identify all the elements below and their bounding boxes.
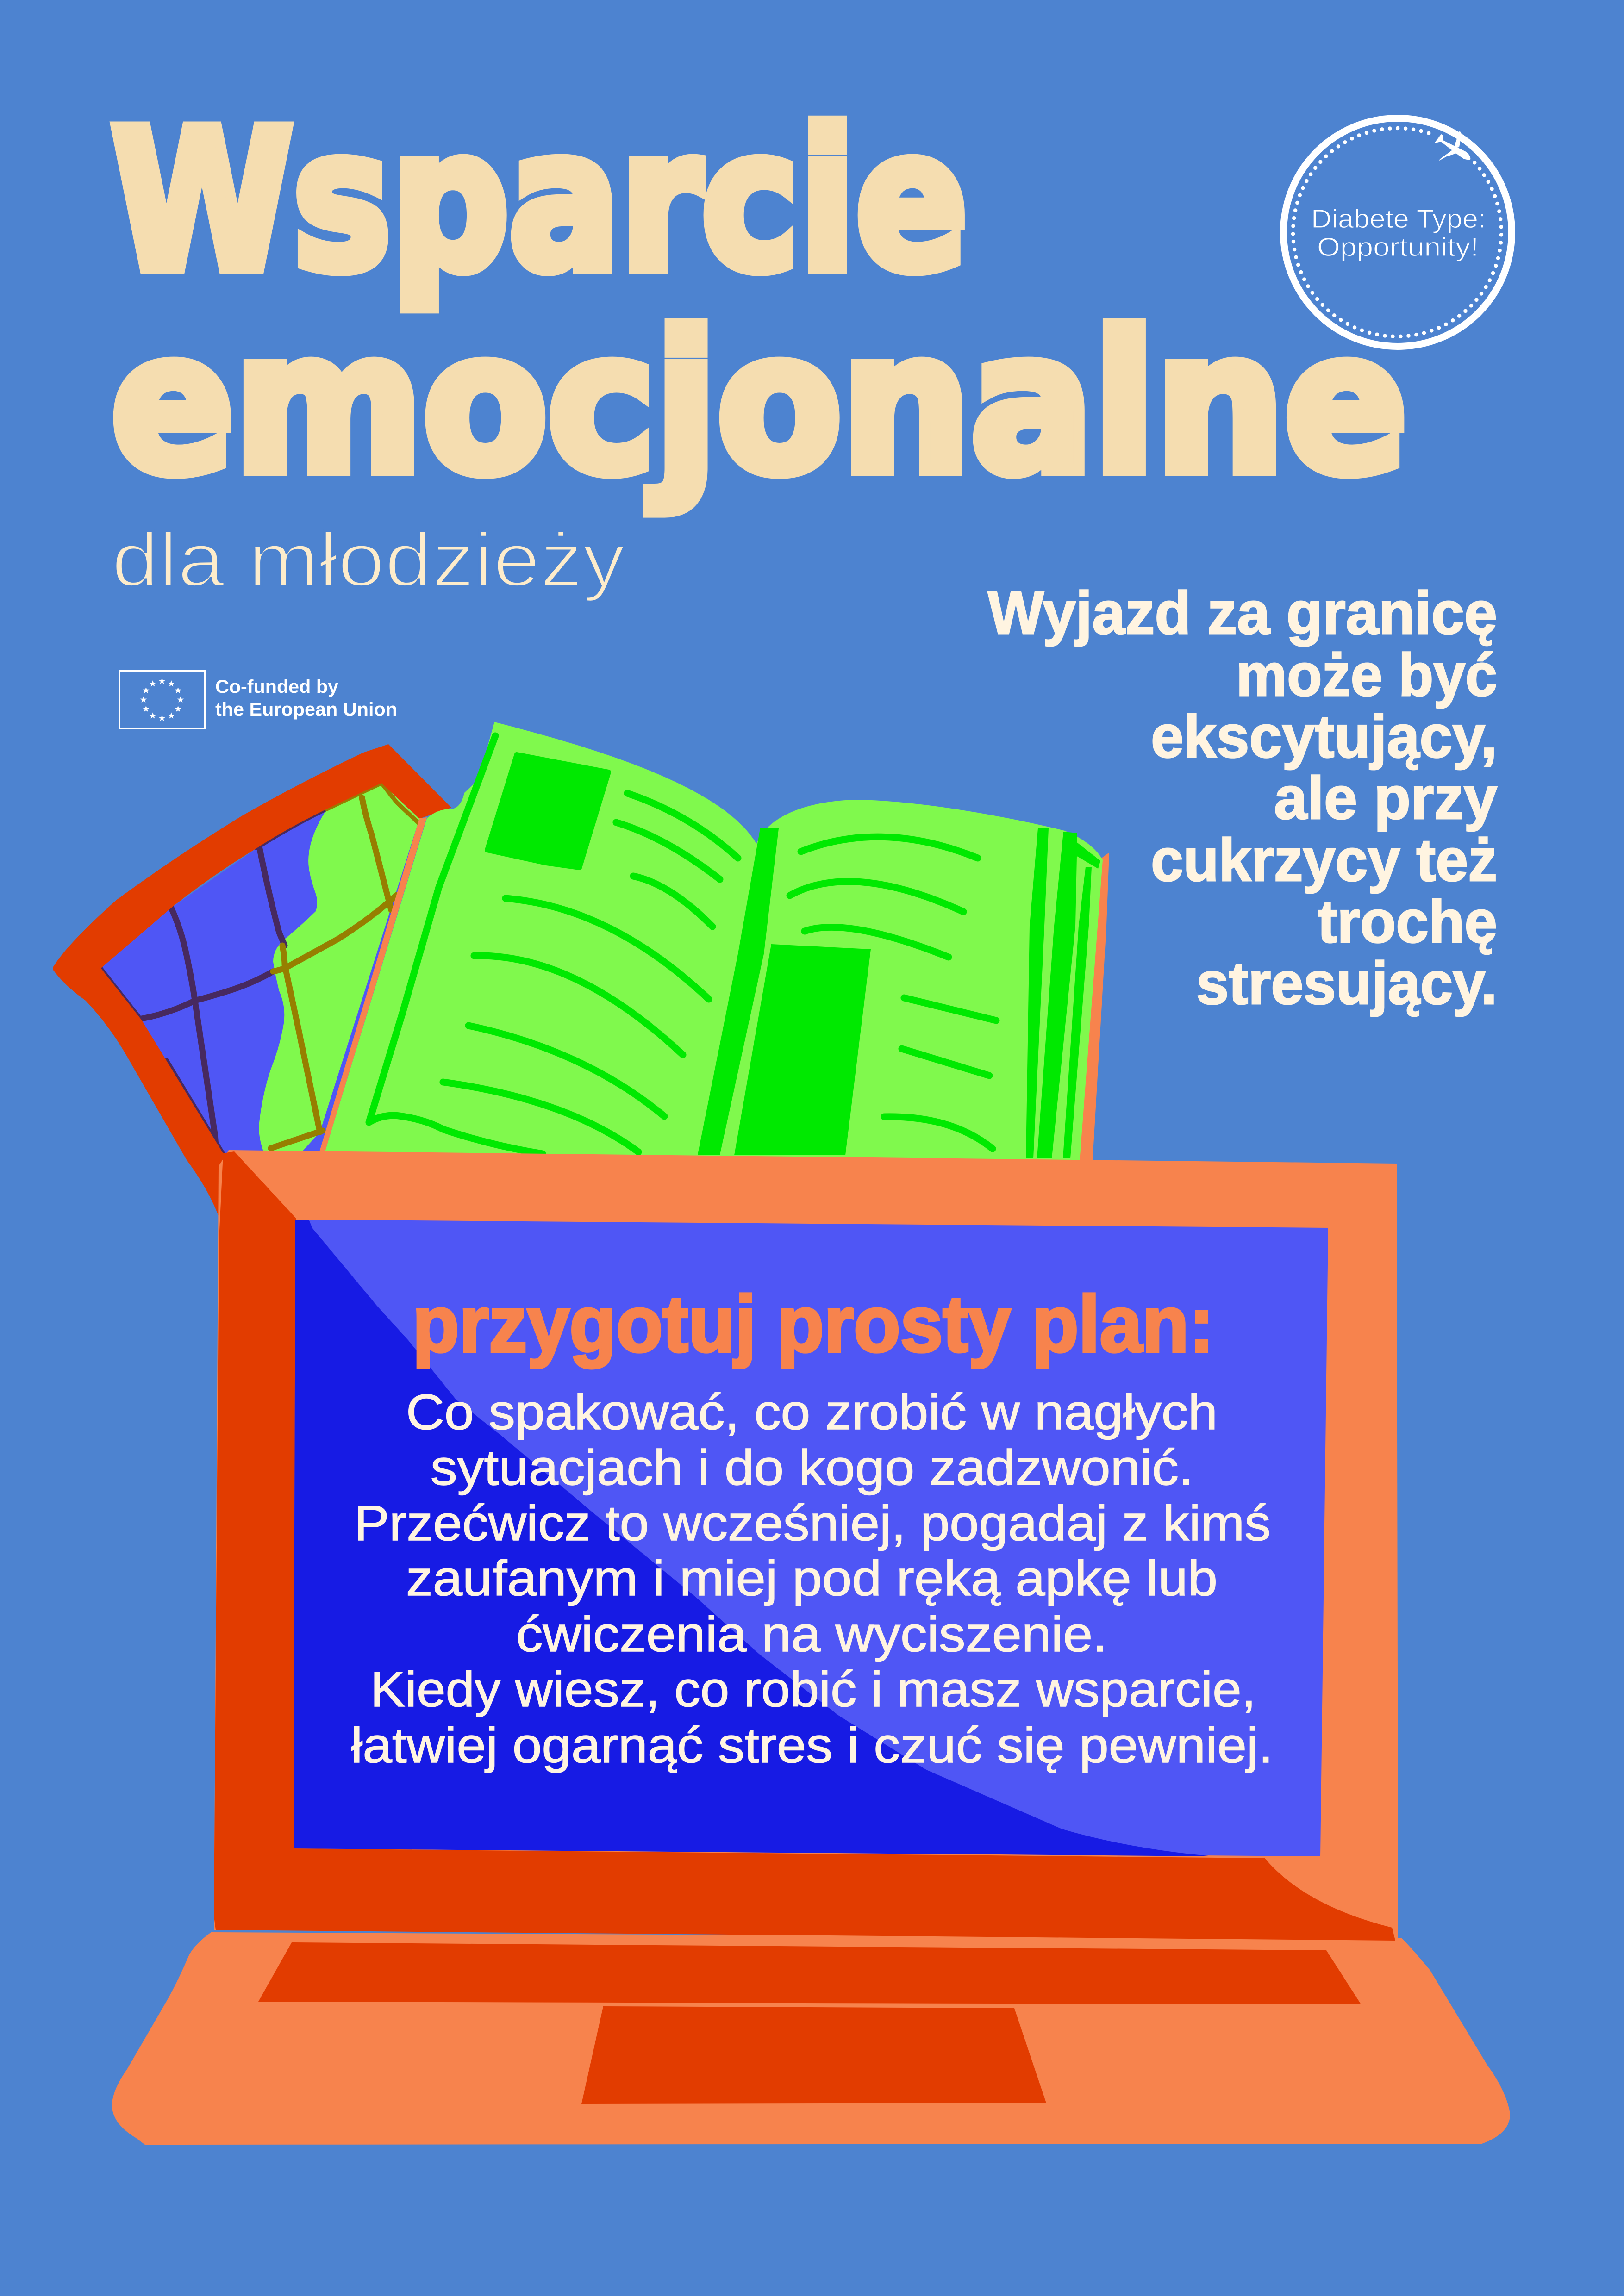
- screen body text: Co spakować, co zrobić w nagłych: [406, 1384, 1218, 1440]
- lid shadow: [214, 1151, 1395, 1941]
- screen shadow: [294, 1220, 1213, 1856]
- screen: [294, 1220, 1328, 1856]
- title line: Wsparcie: Wsparcie: [111, 89, 968, 313]
- intro text block: cukrzycy też: [1151, 826, 1497, 894]
- EU text: Co-funded by: [215, 677, 339, 697]
- badge text: [1311, 204, 1486, 262]
- map frame: [53, 744, 451, 1231]
- book pages: [324, 722, 1103, 1162]
- icon: airplane: [1435, 131, 1470, 161]
- intro text block: ekscytujący,: [1151, 703, 1497, 770]
- EU text: [215, 677, 397, 720]
- intro text block: [988, 579, 1497, 1017]
- touchpad: [581, 2006, 1046, 2104]
- title: [111, 89, 1407, 516]
- badge text: Diabete Type:: [1311, 204, 1486, 234]
- intro text block: może być: [1236, 641, 1497, 709]
- illustration: open book: [319, 722, 1109, 1162]
- intro text block: ale przy: [1274, 764, 1497, 832]
- map sea: [101, 783, 419, 1153]
- title line: emocjonalne: emocjonalne: [111, 292, 1407, 516]
- EU text: the European Union: [215, 699, 397, 720]
- map land: [259, 783, 419, 1152]
- screen body text: Kiedy wiesz, co robić i masz wsparcie,: [370, 1661, 1256, 1717]
- illustration: laptop: [112, 1150, 1510, 2145]
- screen body text: [351, 1384, 1273, 1773]
- screen body text: sytuacjach i do kogo zadzwonić.: [431, 1439, 1193, 1495]
- subtitle: dla młodzieży: [112, 517, 625, 602]
- intro text block: stresujący.: [1196, 949, 1497, 1017]
- EU flag outline with stars: [119, 671, 205, 728]
- book spine and dark blocks: [487, 754, 1100, 1158]
- screen body text: zaufanym i miej pod ręką apkę lub: [406, 1550, 1218, 1606]
- screen heading: przygotuj prosty plan:: [412, 1280, 1214, 1369]
- illustration: folded map: [53, 744, 451, 1231]
- screen body text: ćwiczenia na wyciszenie.: [516, 1606, 1107, 1662]
- screen body text: Przećwicz to wcześniej, pogadaj z kimś: [354, 1495, 1271, 1551]
- book text strokes: [369, 736, 996, 1154]
- intro text block: Wyjazd za granicę: [988, 579, 1497, 647]
- intro text block: trochę: [1318, 888, 1497, 955]
- badge text: Opportunity!: [1317, 232, 1479, 262]
- book cover edges: [319, 817, 1109, 1162]
- badge: Diabete Type Opportunity: [1283, 118, 1512, 346]
- laptop lid: [214, 1150, 1398, 1939]
- screen body text: łatwiej ogarnąć stres i czuć się pewniej.: [351, 1717, 1273, 1773]
- map grid lines: [101, 783, 419, 1153]
- EU co-funding logo: [119, 671, 397, 728]
- keyboard: [258, 1942, 1361, 2004]
- laptop base: [112, 1932, 1510, 2145]
